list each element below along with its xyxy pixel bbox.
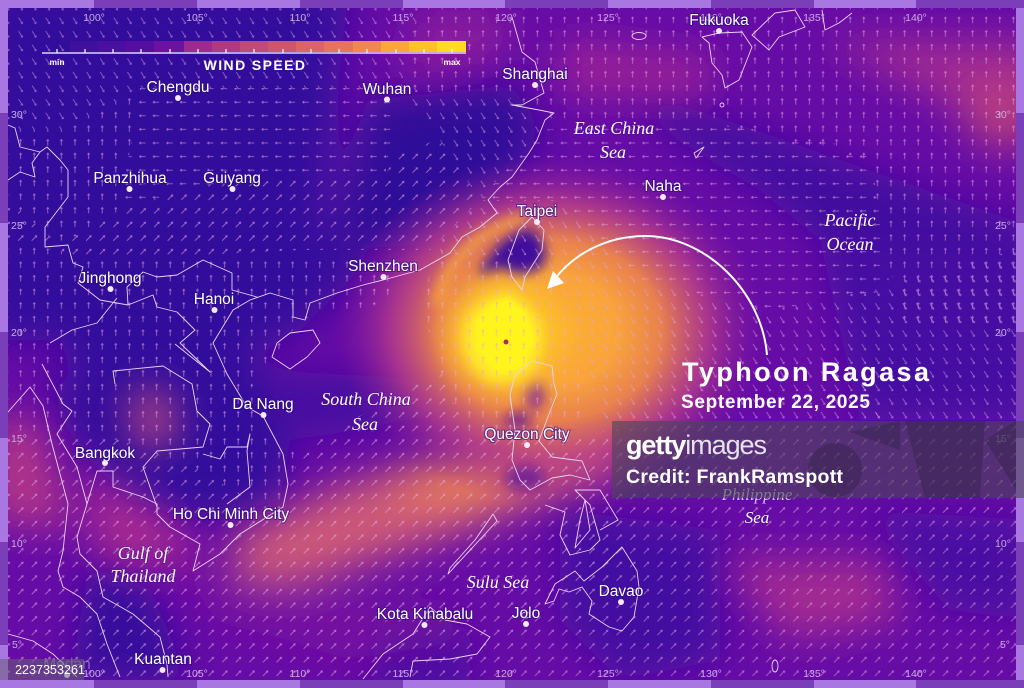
degree labels: 135° <box>803 12 825 24</box>
sea labels <box>110 118 875 592</box>
degree labels: 135° <box>803 668 825 680</box>
city: Taipei: Taipei <box>517 203 557 220</box>
sea: East China Sea: East China <box>573 118 654 138</box>
degree labels: 140° <box>905 12 927 24</box>
degree labels: 120° <box>495 668 517 680</box>
city: Medan: Medan <box>43 656 91 673</box>
typhoon inner core <box>448 280 560 392</box>
wind speed legend <box>42 41 466 73</box>
image id tag <box>0 659 85 680</box>
hainan <box>272 330 320 369</box>
small islands <box>632 32 646 40</box>
degree labels: 105° <box>186 12 208 24</box>
degree labels: 15° <box>11 433 27 445</box>
degree labels: 100° <box>83 12 105 24</box>
degree labels: 115° <box>393 12 413 24</box>
image id tag: 2237353261 <box>15 663 85 677</box>
watermark panel <box>612 421 1024 498</box>
sumatra <box>8 634 77 677</box>
visayas islands <box>545 490 618 555</box>
china and vietnam coast <box>77 17 554 677</box>
city: Panzhihua: Panzhihua <box>93 170 167 187</box>
degree labels: 125° <box>597 668 619 680</box>
degree labels: 140° <box>905 668 927 680</box>
dark low-wind zones around typhoon <box>478 228 545 490</box>
kyushu <box>702 32 752 88</box>
palawan <box>448 514 497 574</box>
city: Davao: Davao <box>599 583 643 600</box>
city: Wuhan: Wuhan <box>363 81 411 98</box>
city: Kota Kinabalu: Kota Kinabalu <box>377 606 473 623</box>
degree labels: 5° <box>1000 639 1010 651</box>
legend min label: min <box>49 57 65 67</box>
sea: Gulf of Thailand: Gulf of <box>118 543 171 563</box>
legend axis <box>42 49 466 53</box>
degree labels: 125° <box>597 12 619 24</box>
city: Jolo: Jolo <box>512 605 540 622</box>
degree labels: 110° <box>290 12 310 24</box>
honshu and shikoku <box>752 10 805 50</box>
degree labels: 130° <box>700 12 722 24</box>
sea: South China Sea: Sea <box>352 414 378 434</box>
degree labels: 120° <box>495 12 517 24</box>
wind field: typhoon outer glow <box>335 155 765 505</box>
degree labels: 105° <box>186 668 208 680</box>
taiwan <box>508 217 544 290</box>
city: Chengdu: Chengdu <box>147 79 209 96</box>
city: Da Nang: Da Nang <box>232 396 294 413</box>
typhoon outer rain band <box>437 217 525 305</box>
legend title: WIND SPEED <box>204 57 306 73</box>
mindanao <box>545 547 639 631</box>
myanmar and china borders <box>8 125 257 305</box>
sea: Philippine Sea: Sea <box>745 508 769 527</box>
getty images logo text: gettyimages <box>626 430 767 460</box>
sea: Pacific Ocean: Pacific <box>824 210 875 230</box>
title: Typhoon Ragasa <box>682 357 930 387</box>
sea: Philippine Sea: Philippine <box>721 485 793 504</box>
wind field: south china sea band <box>170 420 620 660</box>
degree labels: 20° <box>995 327 1011 339</box>
luzon <box>510 361 590 490</box>
degree labels: 25° <box>11 220 27 232</box>
degree labels: 10° <box>11 538 27 550</box>
sea: Pacific Ocean: Ocean <box>827 234 873 254</box>
city: Guiyang: Guiyang <box>203 170 261 187</box>
degree labels: 10° <box>995 538 1011 550</box>
city: Shanghai: Shanghai <box>502 66 568 83</box>
city: Naha: Naha <box>644 178 682 195</box>
date subtitle: September 22, 2025 <box>681 392 870 413</box>
sea: Gulf of Thailand: Thailand <box>110 566 177 586</box>
legend colour steps <box>70 41 466 52</box>
city: Hanoi: Hanoi <box>194 291 234 308</box>
typhoon eye <box>504 340 508 344</box>
sea: South China Sea: South China <box>321 389 411 409</box>
city: Bangkok: Bangkok <box>75 445 135 462</box>
sea: East China Sea: Sea <box>600 142 626 162</box>
city: Quezon City: Quezon City <box>484 426 570 443</box>
degree labels: 30° <box>11 109 27 121</box>
degree labels: 110° <box>290 668 310 680</box>
city: Kuantan: Kuantan <box>134 651 192 668</box>
borneo <box>363 607 490 679</box>
degree labels: 20° <box>11 327 27 339</box>
degree labels: 15° <box>995 433 1011 445</box>
credit line: Credit: FrankRamspott <box>626 466 844 488</box>
legend max label: max <box>443 57 461 67</box>
degree labels: 25° <box>995 220 1011 232</box>
watermark decorative shapes <box>808 421 1016 498</box>
city: Shenzhen: Shenzhen <box>348 258 418 275</box>
degree labels: 30° <box>995 109 1011 121</box>
degree labels: 130° <box>700 668 722 680</box>
degree labels: 100° <box>83 668 105 680</box>
degree labels: 5° <box>12 639 22 651</box>
city: Jinghong: Jinghong <box>79 270 141 287</box>
degree labels: 115° <box>393 668 413 680</box>
city: Ho Chi Minh City: Ho Chi Minh City <box>173 506 289 523</box>
city labels <box>43 12 749 678</box>
arrow: typhoon track curve <box>547 236 767 355</box>
city: Fukuoka: Fukuoka <box>689 12 749 29</box>
sea: Sulu Sea: Sulu Sea <box>467 572 529 592</box>
